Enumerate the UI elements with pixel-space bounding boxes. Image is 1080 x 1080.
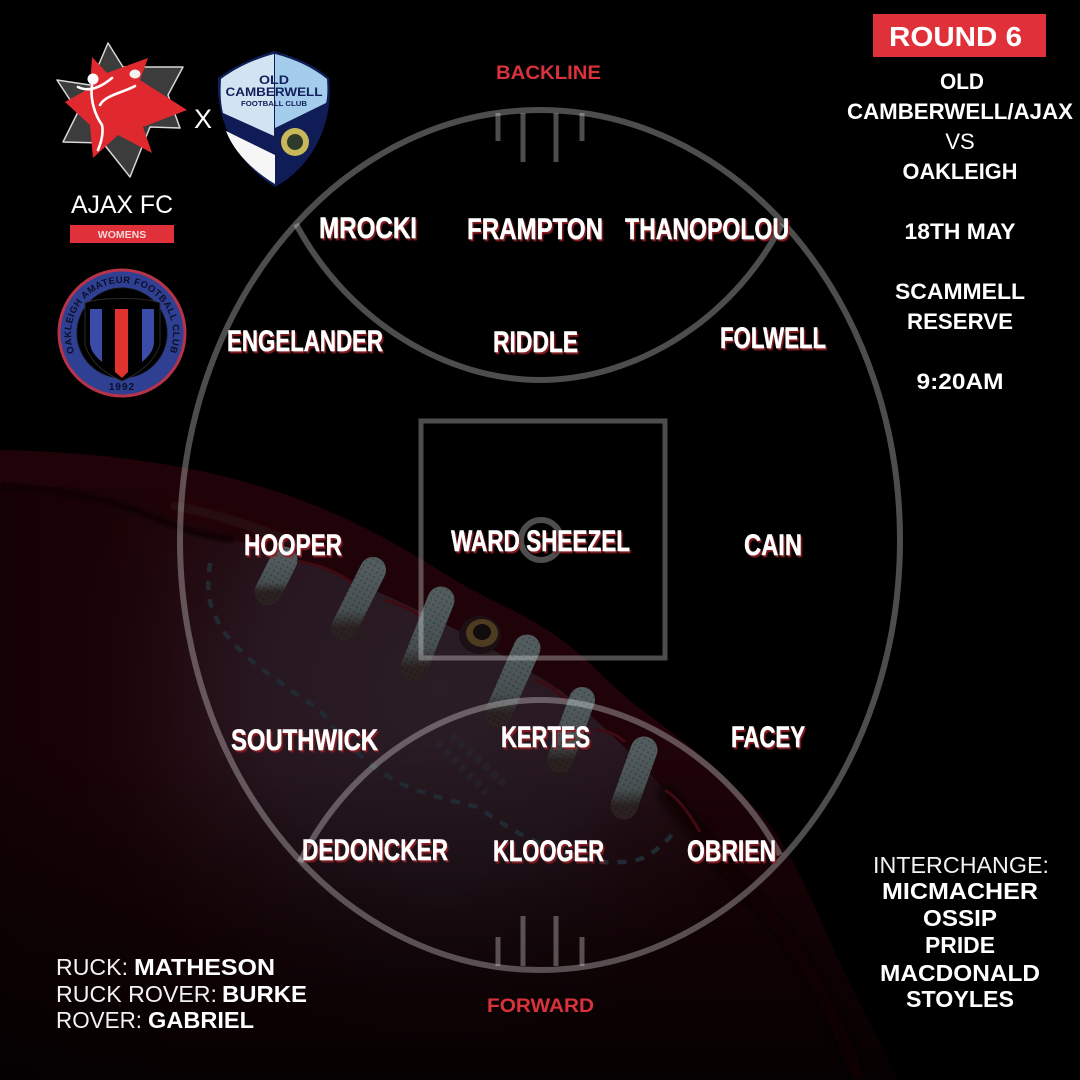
top goal posts: [498, 113, 582, 162]
midfield roles: BURKE: [222, 981, 307, 1007]
icon: Old Camberwell shield: [218, 51, 330, 187]
match details: CAMBERWELL/AJAX: [847, 99, 1073, 124]
centre square: [421, 421, 665, 658]
interchange list: MACDONALD: [880, 960, 1040, 986]
player names: HOOPER: [244, 529, 342, 562]
match details: OAKLEIGH: [902, 159, 1018, 184]
ball stitching: [208, 563, 675, 862]
player names: ENGELANDER: [227, 325, 383, 358]
player names: RIDDLE: [493, 326, 578, 359]
icon: Ajax FC star logo: [57, 43, 187, 177]
player names: SOUTHWICK: [231, 724, 378, 757]
match details: RESERVE: [907, 309, 1013, 334]
player names: FRAMPTON: [467, 213, 603, 246]
midfield roles: RUCK:: [56, 954, 128, 980]
midfield roles: MATHESON: [134, 954, 275, 980]
match details: SCAMMELL: [895, 279, 1025, 304]
oval boundary: [180, 110, 900, 970]
player names: OBRIEN: [687, 835, 776, 868]
interchange list: MICMACHER: [882, 878, 1038, 904]
icon: Oakleigh badge: 1992: [109, 382, 135, 393]
match details: OLD: [940, 69, 984, 94]
bottom 50m arc: [300, 700, 780, 862]
player names: FACEY: [731, 721, 805, 754]
round badge: ROUND 6: [889, 21, 1022, 52]
centre circle: [521, 520, 561, 560]
ball laces: [268, 560, 644, 806]
player names: [227, 212, 826, 868]
match details: VS: [945, 129, 975, 154]
player names: MROCKI: [319, 212, 417, 245]
x separator: X: [194, 104, 212, 134]
interchange list: [873, 852, 1049, 1012]
interchange list: STOYLES: [906, 986, 1014, 1012]
player names: DEDONCKER: [302, 834, 448, 867]
midfield roles: [56, 954, 307, 1033]
icon: Oakleigh badge: OAKLEIGH AMATEUR FOOTBALL CLUB: [64, 276, 180, 354]
player names: THANOPOLOU: [625, 213, 789, 246]
top 50m arc: [296, 224, 782, 380]
bottom goal posts: [498, 916, 582, 966]
player names: WARD SHEEZEL: [451, 525, 630, 558]
ball imprint: [437, 735, 505, 793]
match details: 18TH MAY: [904, 219, 1016, 244]
match details: 9:20AM: [916, 369, 1004, 394]
lace slits: [290, 560, 700, 832]
icon: Old Camberwell shield: CAMBERWELL: [226, 85, 322, 99]
ball valve: [459, 616, 501, 654]
icon: Old Camberwell shield: OLD: [259, 75, 289, 87]
interchange list: PRIDE: [925, 932, 995, 958]
player names: KLOOGER: [493, 835, 604, 868]
football background image: [0, 440, 900, 1080]
heading: backline: BACKLINE: [496, 63, 601, 84]
round badge: [873, 14, 1046, 57]
womens badge: WOMENS: [98, 229, 146, 241]
heading: forward: FORWARD: [487, 996, 594, 1017]
icon: Oakleigh badge: [58, 268, 186, 398]
midfield roles: ROVER:: [56, 1007, 142, 1033]
midfield roles: GABRIEL: [148, 1007, 254, 1033]
interchange list: INTERCHANGE:: [873, 852, 1049, 878]
womens badge: [70, 225, 174, 243]
match details: [847, 69, 1073, 394]
Ajax FC wordmark: AJAX FC: [71, 191, 173, 219]
playing field lines: [180, 110, 900, 970]
midfield roles: RUCK ROVER:: [56, 981, 217, 1007]
player names: CAIN: [744, 529, 802, 562]
interchange list: OSSIP: [923, 905, 997, 931]
icon: Old Camberwell shield: FOOTBALL CLUB: [241, 99, 308, 108]
player names: KERTES: [501, 721, 590, 754]
player names: FOLWELL: [720, 322, 826, 355]
